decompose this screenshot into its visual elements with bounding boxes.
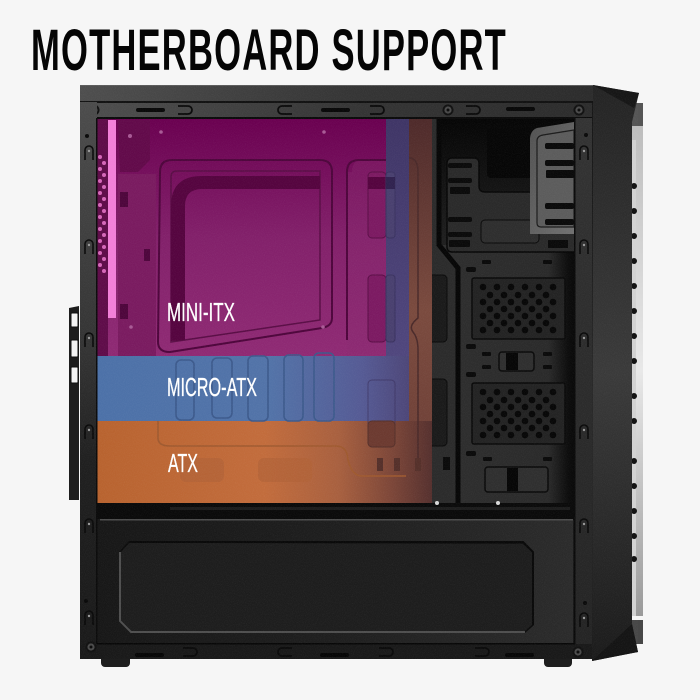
cable gap above shroud	[97, 501, 575, 520]
right frame rail	[574, 118, 592, 645]
bright pink strip	[108, 120, 116, 318]
dark divider curve	[439, 118, 458, 505]
left gray rail beside overlay	[420, 118, 458, 505]
Mini-ITX zone	[97, 119, 386, 356]
chassis body	[80, 85, 594, 659]
power supply shroud	[97, 519, 573, 644]
perforated edge	[97, 119, 108, 356]
lower cage wall	[441, 245, 575, 505]
recess slots	[368, 172, 386, 342]
hard drive bracket	[530, 122, 574, 234]
rear bracket	[69, 306, 79, 500]
slider cutouts	[485, 352, 548, 492]
right recess	[347, 160, 386, 356]
mesh panel lower	[472, 383, 565, 444]
PC case	[69, 85, 643, 667]
Micro-ATX zone	[97, 119, 409, 421]
dark upper recess	[487, 128, 532, 178]
dark tray channel	[171, 176, 320, 341]
small cage slots	[443, 260, 552, 470]
shroud inset panel	[120, 542, 533, 632]
interior right side	[420, 118, 576, 505]
front bezel	[592, 85, 639, 661]
motherboard tray recess	[158, 160, 332, 352]
bottom frame band	[80, 642, 594, 659]
perforations	[98, 155, 106, 273]
interior back wall	[432, 118, 576, 258]
metal grain texture	[80, 85, 638, 659]
left frame rail	[80, 102, 98, 659]
top frame fittings	[88, 104, 584, 116]
blue strip detail	[368, 172, 395, 446]
micro-ATX tray detail	[176, 353, 334, 421]
standoff blocks	[120, 192, 150, 319]
case feet	[101, 654, 572, 667]
upper plate slots	[448, 163, 568, 248]
ATX tray detail	[158, 421, 421, 482]
side recess slots	[423, 275, 447, 446]
mesh panel upper	[472, 278, 565, 339]
small screw marks	[128, 130, 326, 329]
motherboard size overlay	[97, 119, 432, 503]
label: Micro-ATX: MICRO-ATX	[167, 372, 257, 402]
upper plate	[447, 158, 575, 252]
label: Mini-ITX: MINI-ITX	[167, 297, 235, 327]
label: ATX: ATX	[168, 448, 198, 478]
top frame band	[80, 85, 594, 119]
right side light strip	[630, 103, 643, 644]
left bracket ridge	[118, 120, 150, 172]
ATX zone	[97, 119, 432, 503]
brown strip detail	[409, 158, 418, 470]
